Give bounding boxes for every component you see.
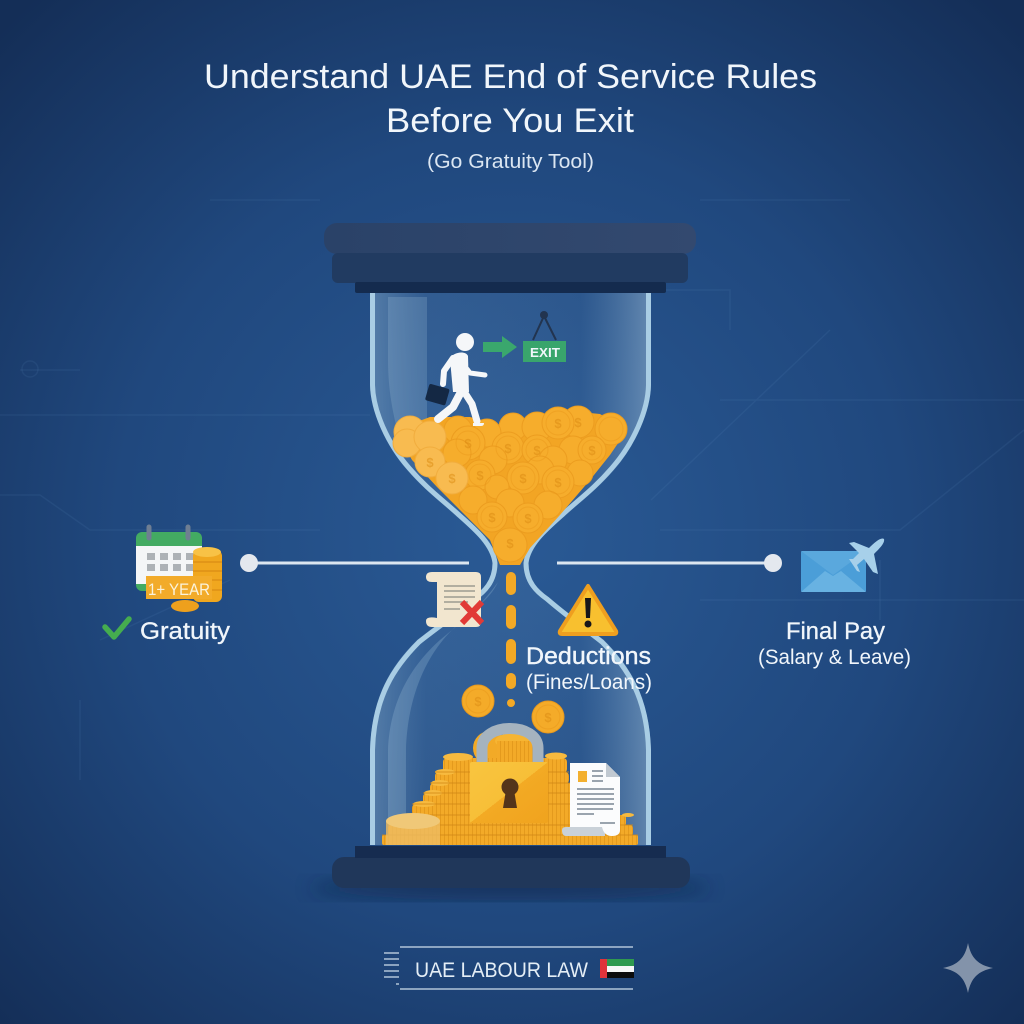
- label: gratuity: [105, 618, 230, 645]
- upper coin pile: $: [504, 441, 512, 456]
- label: deductions: [526, 643, 652, 694]
- upper coin pile: $: [476, 468, 484, 483]
- falling coins: $: [544, 710, 552, 725]
- scroll with red cross: [426, 572, 482, 627]
- upper coin pile: $: [554, 475, 562, 490]
- upper coin pile: $: [506, 536, 514, 551]
- upper coin pile: $: [588, 443, 596, 458]
- label: final pay: Final Pay: [786, 618, 885, 645]
- falling coins: [462, 685, 564, 733]
- label: gratuity: Gratuity: [140, 618, 230, 645]
- upper coin pile: $: [524, 511, 532, 526]
- exiting person: [425, 333, 485, 426]
- green arrow: [483, 336, 517, 358]
- glass outline: [372, 293, 648, 845]
- flag: UAE: [600, 959, 634, 978]
- upper coin pile: $: [519, 471, 527, 486]
- briefcase: [425, 384, 450, 406]
- upper coin pile: $: [554, 416, 562, 431]
- footer badge: [384, 947, 634, 989]
- icon: envelope and plane: [801, 539, 884, 592]
- footer badge: UAE LABOUR LAW: [415, 959, 588, 982]
- title: Understand UAE End of Service Rules: [204, 58, 817, 96]
- base shadow: [310, 876, 710, 900]
- falling coin stream: [506, 572, 516, 707]
- label: deductions: Deductions: [526, 643, 651, 670]
- glass upper highlight: [388, 297, 427, 425]
- exit sign: EXIT: [530, 345, 560, 360]
- connector: gratuity: [240, 554, 469, 572]
- icon: calendar with coins: 1+ YEAR: [148, 580, 210, 599]
- title: [204, 58, 817, 173]
- upper coin pile: $: [533, 443, 541, 458]
- background circuit lines: [0, 200, 1024, 780]
- label: deductions: (Fines/Loans): [526, 671, 652, 694]
- upper coin pile: $: [448, 471, 456, 486]
- upper coin pile: $: [488, 510, 496, 525]
- glass body: [370, 293, 651, 845]
- label: final pay: (Salary & Leave): [758, 646, 911, 669]
- glass lower inner band: [388, 582, 498, 845]
- icon: calendar with coins: [136, 527, 222, 612]
- title: (Go Gratuity Tool): [427, 151, 594, 173]
- top cap: [324, 223, 696, 293]
- upper coin pile: $: [426, 455, 434, 470]
- hourglass: [310, 223, 710, 900]
- title: Before You Exit: [386, 102, 635, 140]
- connector: final pay: [557, 554, 782, 572]
- bottom cap: [332, 846, 690, 888]
- falling coins: $: [474, 694, 482, 709]
- label: final pay: [758, 618, 911, 669]
- document: [562, 763, 620, 836]
- warning triangle: [560, 586, 616, 634]
- exit sign: [523, 311, 566, 362]
- upper coin pile: $: [464, 436, 472, 451]
- upper coin pile: $: [574, 415, 582, 430]
- sparkle mark: [943, 943, 993, 993]
- padlock: [470, 728, 548, 823]
- lower coin pile: [382, 731, 638, 845]
- upper coin pile: [393, 406, 627, 565]
